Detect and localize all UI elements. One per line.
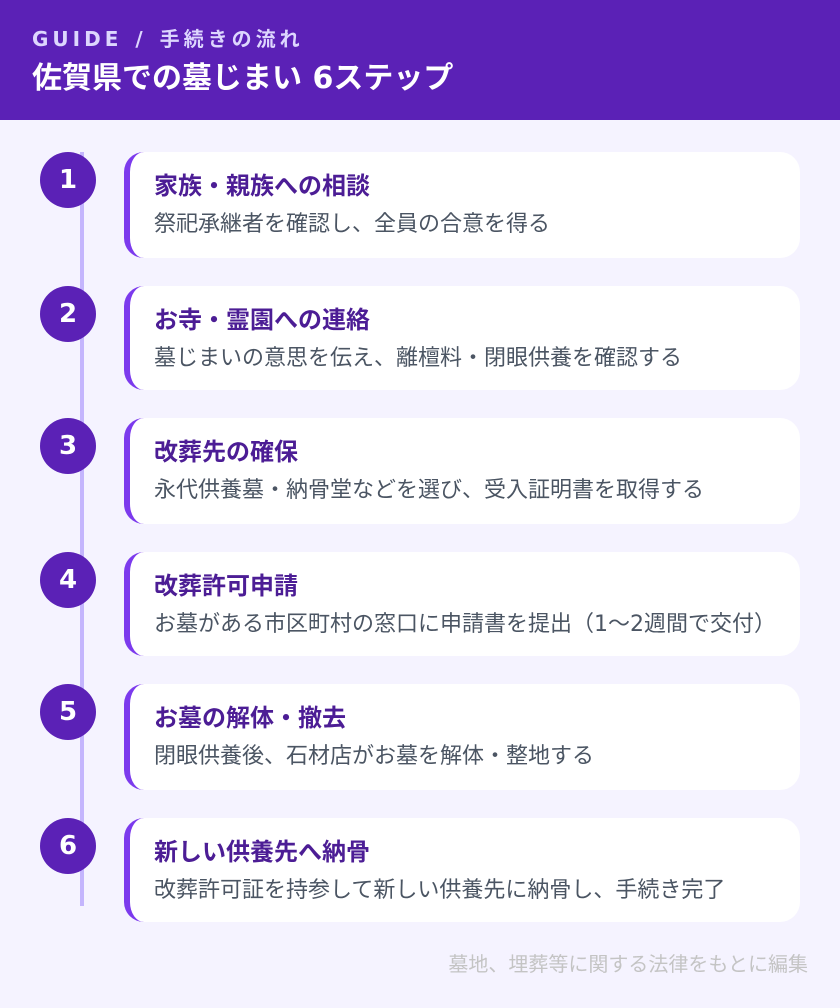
step 1 number: 1 [59,165,77,195]
timeline line [80,152,84,906]
step 3 heading: 改葬先の確保 [154,438,298,466]
step 3 number: 3 [59,431,77,461]
step 3 card [124,418,800,524]
step 5 card [124,684,800,790]
step 1 heading: 家族・親族への相談 [154,172,370,200]
source note: 墓地、埋葬等に関する法律をもとに編集 [448,952,808,976]
step 1 number [40,152,96,208]
step 5 number: 5 [59,697,77,727]
eyebrow label: GUIDE / 手続きの流れ [32,27,304,51]
step 4 card [124,552,800,656]
header band [0,0,840,120]
step 4 text: お墓がある市区町村の窓口に申請書を提出（1～2週間で交付） [154,612,776,637]
step 2 card [124,286,800,390]
step 4 number [40,552,96,608]
step 2 text: 墓じまいの意思を伝え、離檀料・閉眼供養を確認する [154,346,682,371]
step 1 text: 祭祀承継者を確認し、全員の合意を得る [154,212,550,237]
step 4 number: 4 [59,565,77,595]
step 6 text: 改葬許可証を持参して新しい供養先に納骨し、手続き完了 [154,878,725,903]
step 5 text: 閉眼供養後、石材店がお墓を解体・整地する [154,744,594,769]
step 6 card [124,818,800,922]
step 5 number [40,684,96,740]
step 4 heading: 改葬許可申請 [154,572,298,600]
step 6 heading: 新しい供養先へ納骨 [154,838,370,866]
step 5 heading: お墓の解体・撤去 [154,704,346,732]
step 2 heading: お寺・霊園への連絡 [154,306,370,334]
title: 佐賀県での墓じまい 6ステップ [32,61,453,96]
step 6 number: 6 [59,831,77,861]
step 6 number [40,818,96,874]
step 3 text: 永代供養墓・納骨堂などを選び、受入証明書を取得する [154,478,704,503]
step 2 number: 2 [59,299,77,329]
step 2 number [40,286,96,342]
step 3 number [40,418,96,474]
step 1 card [124,152,800,258]
